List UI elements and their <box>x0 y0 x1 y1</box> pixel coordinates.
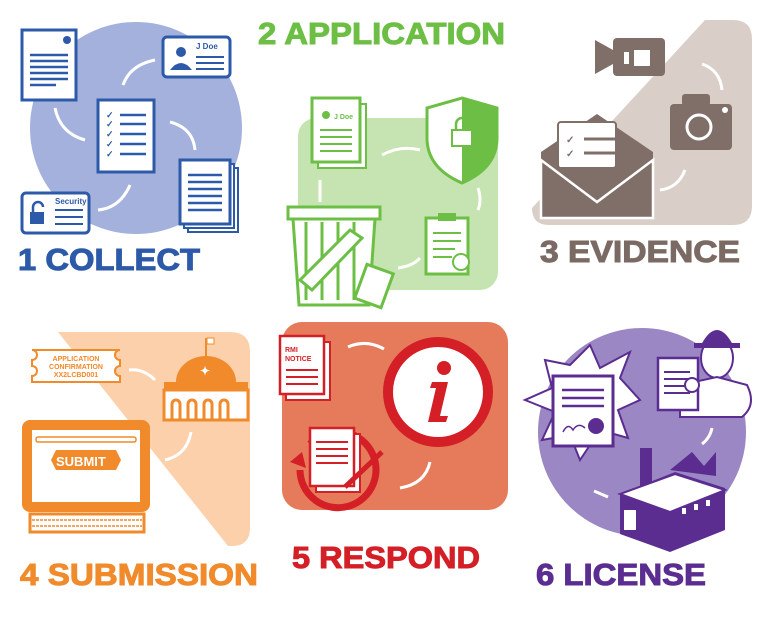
icon: checklist: ✓ <box>106 129 114 139</box>
icon: documents with pen and circular arrow <box>290 428 382 508</box>
icon: RMI notice: NOTICE <box>285 356 312 363</box>
icon: ID card J Doe <box>163 37 230 77</box>
icon: government building <box>164 338 248 420</box>
heading: 1 COLLECT: 1 COLLECT <box>18 242 200 277</box>
icon: confirmation ticket: XX2LCBD001 <box>54 372 98 379</box>
icon: confirmation ticket <box>32 350 120 382</box>
icon: factory <box>620 448 725 552</box>
license background circle <box>538 328 746 536</box>
arrows: application cycle <box>320 148 480 268</box>
heading: 4 SUBMISSION: 4 SUBMISSION <box>20 557 258 592</box>
icon: clipboard check <box>426 213 469 274</box>
arrows: respond <box>348 343 430 488</box>
panel: collect <box>18 22 242 277</box>
arrows: collect cycle <box>55 60 195 210</box>
icon: envelope with letter: ✓ <box>566 149 574 160</box>
icon: envelope with letter: ✓ <box>566 135 574 146</box>
icon: confirmation ticket: APPLICATION <box>53 356 99 363</box>
icon: document top-left <box>22 30 76 100</box>
icon: checklist <box>98 100 154 172</box>
heading: 3 EVIDENCE: 3 EVIDENCE <box>540 234 740 269</box>
arrows: license <box>594 428 712 497</box>
heading: 2 APPLICATION: 2 APPLICATION <box>258 16 505 51</box>
arrows: submission <box>129 370 191 460</box>
panel: application <box>258 16 505 308</box>
panel: evidence <box>532 20 752 269</box>
panel: respond <box>280 322 508 575</box>
icon: security card <box>22 193 89 233</box>
icon: video camera <box>595 38 665 76</box>
icon: checklist: ✓ <box>106 119 114 129</box>
heading: 5 RESPOND: 5 RESPOND <box>292 540 480 575</box>
icon: checklist: ✓ <box>106 110 114 120</box>
icon: shield lock <box>427 98 497 183</box>
icon: computer submit <box>22 420 150 532</box>
icon: government building: ✦ <box>200 364 210 378</box>
icon: security card: Security <box>55 197 87 206</box>
collect background circle <box>30 22 242 234</box>
evidence background <box>532 20 752 225</box>
icon: ID card J Doe: J Doe <box>196 42 218 51</box>
icon: confirmation ticket: CONFIRMATION <box>49 364 103 371</box>
icon: computer submit: SUBMIT <box>56 454 106 469</box>
heading: 6 LICENSE: 6 LICENSE <box>536 557 706 592</box>
icon: J Doe documents: J Doe <box>334 114 353 121</box>
icon: J Doe documents <box>312 98 366 168</box>
icon: inspector with clipboard <box>658 330 751 417</box>
icon: certificate <box>525 345 640 460</box>
icon: checklist: ✓ <box>106 149 114 159</box>
icon: photo camera <box>670 94 732 150</box>
icon: envelope with letter <box>541 114 653 218</box>
icon: checklist: ✓ <box>106 139 114 149</box>
icon: info circle <box>388 342 488 442</box>
panel: submission <box>20 332 258 592</box>
icon: trash bin with tools <box>288 207 393 308</box>
panel: license <box>525 328 751 592</box>
respond background <box>282 322 508 510</box>
application background <box>298 118 498 290</box>
arrows: evidence <box>660 64 722 190</box>
submission background <box>58 332 250 546</box>
icon: RMI notice <box>280 336 330 400</box>
icon: stacked documents <box>180 160 238 232</box>
icon: RMI notice: RMI <box>285 347 298 354</box>
